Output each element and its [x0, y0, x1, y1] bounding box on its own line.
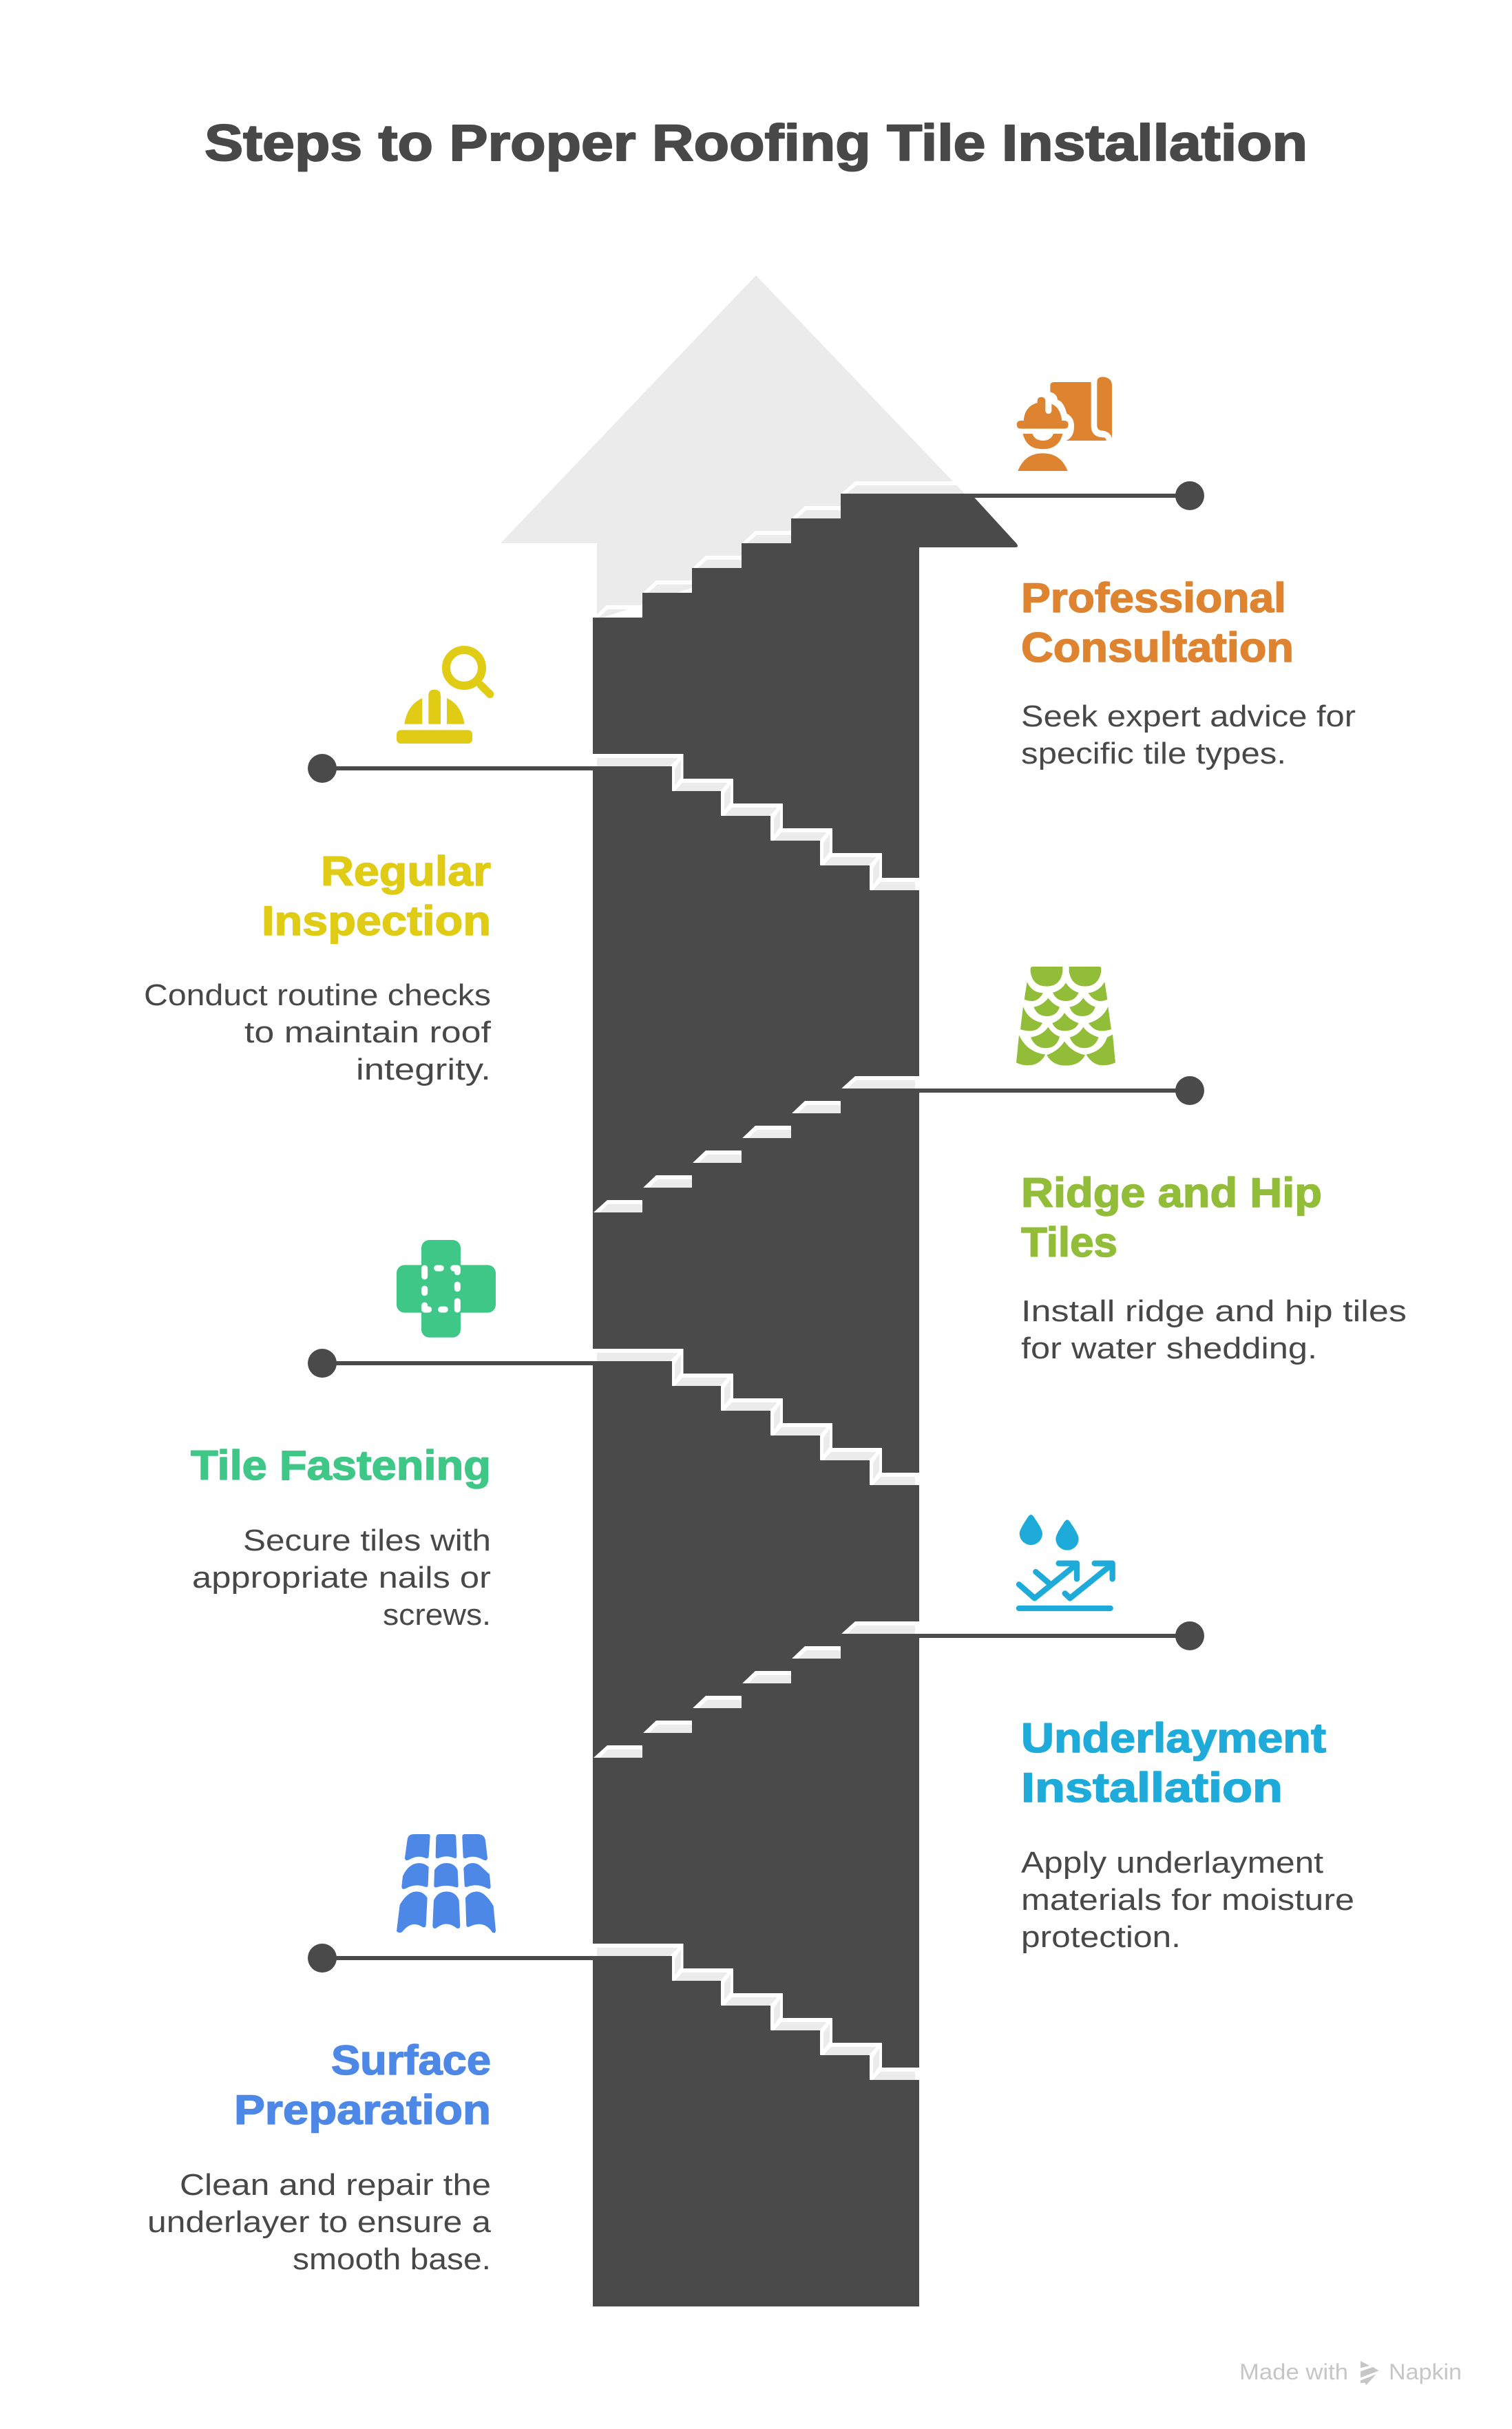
connector line and dot — [308, 1944, 593, 1973]
footer: made with Napkin — [1239, 2359, 1462, 2385]
icon: water drops and arrows — [1019, 1515, 1113, 1608]
stairs: ascending band 4 — [594, 1621, 919, 1758]
connector line and dot — [308, 754, 593, 783]
description: Conduct routine checks — [144, 978, 491, 1012]
panel: professional consultation — [964, 377, 1356, 770]
panel: underlayment installation — [919, 1515, 1354, 1954]
description: Secure tiles with — [243, 1524, 491, 1557]
heading: Surface — [331, 2037, 491, 2083]
connector line and dot — [919, 1621, 1204, 1650]
arrow: white upper stair edge — [594, 481, 957, 618]
description: smooth base. — [293, 2242, 491, 2276]
heading: Installation — [1021, 1765, 1283, 1811]
heading: Regular — [321, 848, 491, 894]
description: appropriate nails or — [192, 1561, 491, 1595]
heading: Consultation — [1021, 624, 1294, 671]
stairs: descending band 1 — [593, 754, 919, 890]
description: screws. — [383, 1598, 491, 1632]
icon: Napkin logo — [1361, 2361, 1379, 2385]
description: Install ridge and hip tiles — [1021, 1294, 1407, 1328]
footer: made with Napkin: Made with — [1239, 2359, 1348, 2384]
heading: Tile Fastening — [191, 1442, 491, 1489]
icon: worker with blueprint — [1017, 377, 1112, 471]
description: protection. — [1021, 1920, 1181, 1954]
description: underlayer to ensure a — [147, 2205, 492, 2239]
footer: made with Napkin: Napkin — [1389, 2359, 1462, 2384]
description: specific tile types. — [1021, 737, 1286, 770]
heading: Preparation — [234, 2087, 491, 2133]
connector line and dot — [919, 1076, 1204, 1105]
heading: Ridge and Hip — [1021, 1170, 1322, 1216]
icon: helmet and magnifier — [397, 650, 490, 744]
arrow: dark stepped column — [593, 494, 1018, 2306]
description: Seek expert advice for — [1021, 700, 1356, 733]
panel: ridge and hip tiles — [919, 967, 1407, 1365]
stairs: descending band 3 — [593, 1349, 919, 1485]
connector line and dot — [308, 1349, 593, 1378]
connector line and dot — [964, 481, 1204, 510]
heading: Inspection — [262, 898, 491, 944]
heading: Tiles — [1021, 1219, 1117, 1265]
description: Apply underlayment — [1021, 1846, 1323, 1880]
stairs: ascending band 2 — [594, 1076, 919, 1212]
description: to maintain roof — [244, 1016, 492, 1049]
arrow: light roof background — [501, 275, 967, 620]
panel: surface preparation — [147, 1834, 593, 2276]
panel: regular inspection — [144, 650, 593, 1086]
icon: bandage cross — [397, 1240, 496, 1338]
heading: Professional — [1021, 575, 1286, 621]
description: for water shedding. — [1021, 1332, 1317, 1365]
description: integrity. — [356, 1053, 491, 1086]
description: materials for moisture — [1021, 1883, 1354, 1917]
icon: roof tiles — [397, 1834, 496, 1933]
title: Steps to Proper Roofing Tile Installation — [204, 114, 1308, 171]
icon: fish-scale ridge tiles — [1016, 967, 1115, 1066]
heading: Underlayment — [1021, 1715, 1326, 1761]
panel: tile fastening — [191, 1240, 593, 1632]
description: Clean and repair the — [180, 2168, 491, 2202]
stairs: descending band 5 — [593, 1944, 919, 2080]
